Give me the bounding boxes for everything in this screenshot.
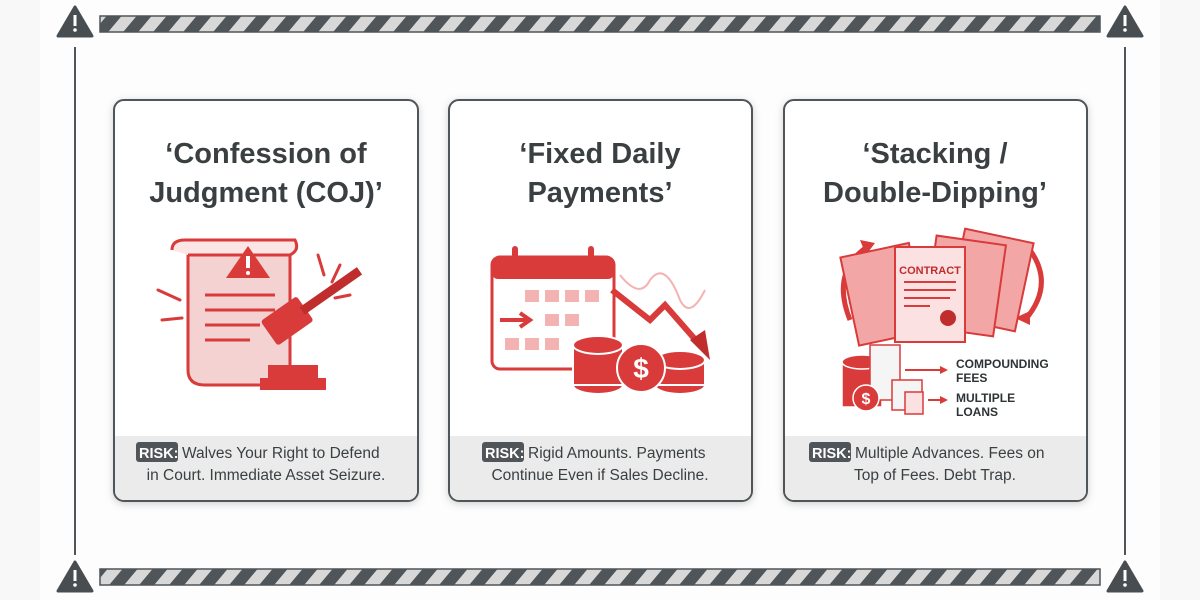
icon: stacked contracts: MULTIPLE bbox=[956, 391, 1015, 405]
hazard frame top bbox=[100, 16, 1100, 32]
panel: confession of judgment: Judgment (COJ)’ bbox=[149, 177, 383, 209]
risk text: Top of Fees. Debt Trap. bbox=[854, 467, 1016, 484]
risk text: Rigid Amounts. Payments bbox=[528, 445, 706, 462]
title: ‘Confession of bbox=[165, 138, 367, 170]
icon: calendar, coins, decline arrow bbox=[492, 246, 710, 394]
panel: stacking bbox=[784, 100, 1087, 501]
icon: stacked contracts: LOANS bbox=[956, 405, 998, 419]
risk text bbox=[482, 442, 709, 484]
risk text: RISK: bbox=[139, 446, 178, 462]
risk text: Walves Your Right to Defend bbox=[182, 445, 380, 462]
panel: fixed daily payments: Payments’ bbox=[527, 177, 673, 209]
panel: stacking: Double-Dipping’ bbox=[823, 177, 1047, 209]
risk text: in Court. Immediate Asset Seizure. bbox=[147, 467, 385, 484]
icon: stacked contracts bbox=[840, 229, 1049, 419]
risk text: RISK: bbox=[812, 446, 851, 462]
icon: stacked contracts: CONTRACT bbox=[899, 265, 961, 277]
panel: fixed daily payments bbox=[449, 100, 752, 501]
risk text bbox=[809, 442, 1045, 484]
risk text: RISK: bbox=[485, 446, 524, 462]
title: ‘Fixed Daily bbox=[519, 138, 681, 170]
risk text bbox=[136, 442, 385, 484]
icon: stacked contracts: FEES bbox=[956, 371, 987, 385]
icon: stacked contracts: COMPOUNDING bbox=[956, 357, 1049, 371]
panel: confession of judgment bbox=[114, 100, 418, 501]
hazard frame bottom bbox=[100, 569, 1100, 585]
risk text: Multiple Advances. Fees on bbox=[855, 445, 1045, 462]
risk text: Continue Even if Sales Decline. bbox=[491, 467, 709, 484]
icon: stacked contracts: $ bbox=[862, 391, 871, 408]
icon: calendar, coins, decline arrow: $ bbox=[633, 353, 649, 384]
icon: scroll with gavel bbox=[158, 240, 368, 390]
title: ‘Stacking / bbox=[862, 138, 1008, 170]
